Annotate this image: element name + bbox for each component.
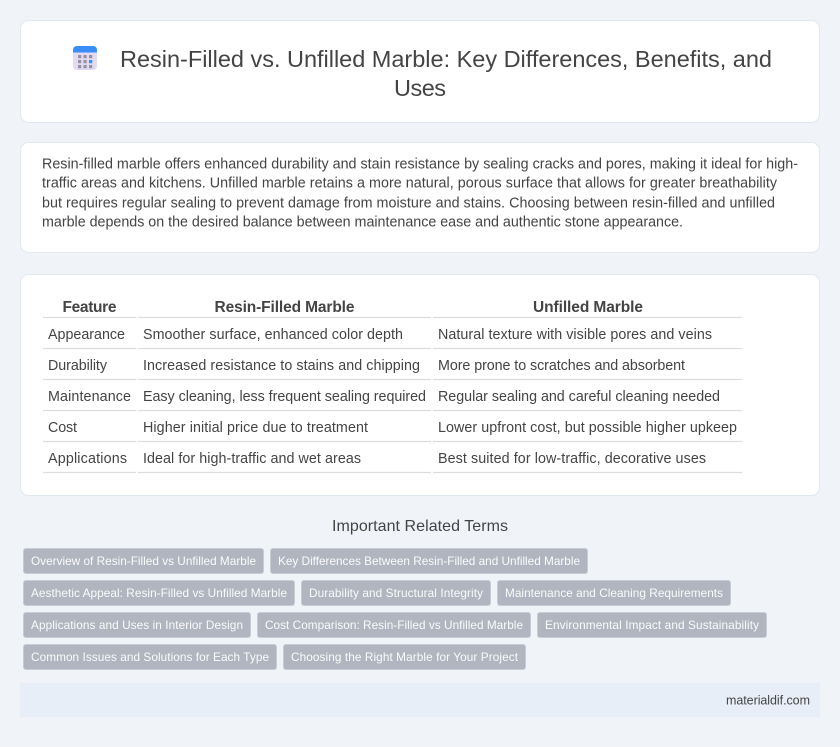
title xyxy=(120,46,772,101)
heading: important related terms: Important Related Terms xyxy=(332,518,508,535)
table row: applications xyxy=(43,451,742,472)
table row: durability: Increased resistance to stains and chipping xyxy=(143,358,420,374)
text block: intro: Resin-filled marble offers enhanced durability and stain resistance by sealing cracks and pores, making it ideal for high- xyxy=(42,156,798,172)
panel: title card xyxy=(20,20,820,122)
tag list: Environmental Impact and Sustainability xyxy=(545,618,759,632)
tag list: Overview of Resin-Filled vs Unfilled Marble xyxy=(31,554,256,568)
title: Resin-Filled vs. Unfilled Marble: Key Differences, Benefits, and xyxy=(120,46,772,72)
table header: Resin-Filled Marble xyxy=(214,299,355,316)
text block: intro: but requires regular sealing to prevent damage from moisture and stains. Choosing between resin-filled and unfilled xyxy=(42,195,775,211)
tag list: Cost Comparison: Resin-Filled vs Unfilled Marble xyxy=(265,618,523,632)
tag list: Applications and Uses in Interior Design xyxy=(31,618,243,632)
table row: maintenance xyxy=(43,389,742,410)
table row: applications: Ideal for high-traffic and wet areas xyxy=(143,451,361,467)
table row: durability: More prone to scratches and absorbent xyxy=(438,358,685,374)
table row: maintenance: Easy cleaning, less frequent sealing required xyxy=(143,389,426,405)
tag list xyxy=(24,548,766,670)
tag list: Durability and Structural Integrity xyxy=(309,586,483,600)
table header: Unfilled Marble xyxy=(533,299,643,316)
table row: durability: Durability xyxy=(48,358,108,374)
table row: maintenance: Maintenance xyxy=(48,389,131,405)
title: Uses xyxy=(394,75,446,101)
icon: calendar xyxy=(73,46,97,70)
text block: intro: traffic areas and kitchens. Unfilled marble retains a more natural, porous surface that allows for greater breathability xyxy=(42,176,778,192)
footer bar xyxy=(20,683,820,717)
table row: appearance xyxy=(43,327,742,348)
table row: cost: Higher initial price due to treatment xyxy=(143,420,368,436)
table row: appearance: Appearance xyxy=(48,327,125,343)
table row: applications: Best suited for low-traffic, decorative uses xyxy=(438,451,706,467)
panel: intro paragraph xyxy=(20,142,820,252)
table header: Feature xyxy=(62,299,117,316)
text block: intro xyxy=(42,156,798,231)
table row: appearance: Smoother surface, enhanced color depth xyxy=(143,327,403,343)
table row: maintenance: Regular sealing and careful cleaning needed xyxy=(438,389,720,405)
tag list: Key Differences Between Resin-Filled and Unfilled Marble xyxy=(278,554,580,568)
tag list: Choosing the Right Marble for Your Project xyxy=(291,650,519,664)
tag list: Aesthetic Appeal: Resin-Filled vs Unfilled Marble xyxy=(31,586,287,600)
footer bar: materialdif.com xyxy=(726,694,810,708)
text block: intro: marble depends on the desired balance between maintenance ease and authentic stone appearance. xyxy=(42,215,683,231)
table row: applications: Applications xyxy=(48,451,127,467)
table row: appearance: Natural texture with visible pores and veins xyxy=(438,327,712,343)
tag list: Common Issues and Solutions for Each Type xyxy=(31,650,269,664)
tag list: Maintenance and Cleaning Requirements xyxy=(505,586,723,600)
table row: cost: Lower upfront cost, but possible higher upkeep xyxy=(438,420,737,436)
panel: comparison table xyxy=(20,274,820,496)
table row: durability xyxy=(43,358,742,380)
table row: cost xyxy=(43,420,742,442)
table header xyxy=(43,299,742,318)
table row: cost: Cost xyxy=(48,420,77,436)
